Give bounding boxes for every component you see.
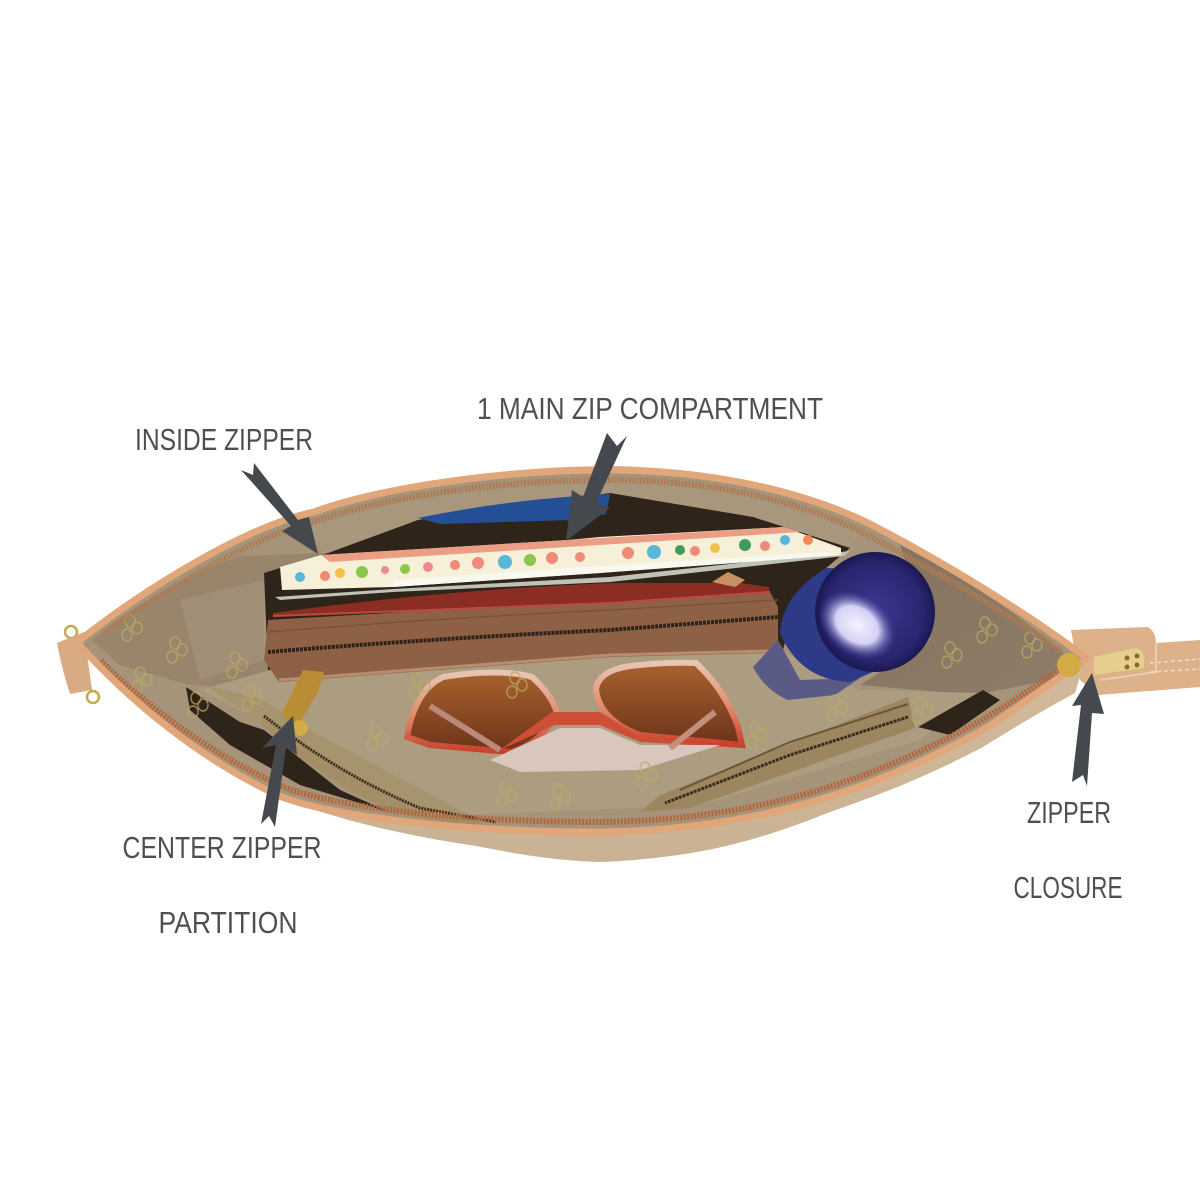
left strap tab — [57, 626, 99, 703]
center zipper partition — [186, 670, 1000, 826]
top lining band — [300, 483, 860, 553]
handbag — [57, 466, 1200, 862]
label: inside zipper: INSIDE ZIPPER — [135, 422, 313, 457]
lining — [80, 470, 1085, 832]
wallet zip pull — [712, 572, 745, 587]
lining motifs — [122, 615, 1042, 810]
blue phone — [418, 494, 610, 524]
label: center zipper partition: PARTITION — [158, 905, 298, 940]
dark opening — [264, 493, 850, 670]
label: zipper closure: CLOSURE — [1014, 870, 1122, 905]
arrow: main compartment — [566, 433, 627, 541]
label: zipper closure — [1014, 795, 1122, 905]
zipper teeth — [100, 480, 1062, 822]
blue bottle — [753, 552, 935, 700]
floor lining — [200, 650, 980, 815]
sunglasses — [407, 663, 742, 772]
notebook flowers — [295, 535, 813, 582]
closure slider — [1057, 653, 1081, 677]
arrow: inside zipper — [241, 463, 318, 554]
label: center zipper partition — [122, 830, 322, 940]
red wallet with zipper — [264, 572, 778, 682]
floral notebook — [275, 527, 850, 600]
wrist strap — [1071, 627, 1200, 695]
label: zipper closure: ZIPPER — [1027, 795, 1111, 830]
label: center zipper partition: CENTER ZIPPER — [122, 830, 322, 865]
arrow: center zipper — [261, 716, 297, 827]
right lining wedge — [860, 545, 1066, 695]
bag exterior — [82, 466, 1085, 862]
label: 1 main zip compartment: 1 MAIN ZIP COMPARTMENT — [477, 391, 823, 426]
leather piping — [80, 470, 1085, 832]
center zipper pull — [282, 670, 324, 725]
arrow: zipper closure — [1072, 673, 1104, 786]
left lining wedge — [92, 553, 328, 690]
